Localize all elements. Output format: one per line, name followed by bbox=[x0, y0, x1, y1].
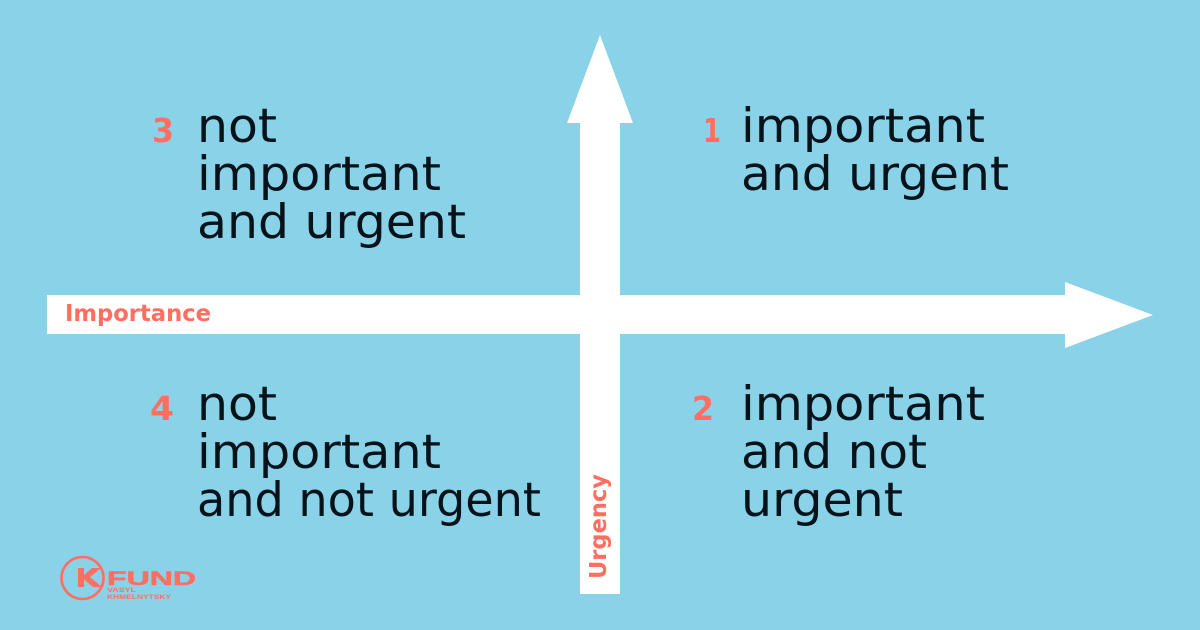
text block 4: not bbox=[197, 377, 277, 432]
text block 2: urgent bbox=[741, 473, 903, 528]
text block 1: and urgent bbox=[741, 147, 1009, 202]
axis label: Importance: Importance bbox=[65, 301, 211, 327]
text block 2: important bbox=[741, 377, 985, 432]
number 3: 3 bbox=[152, 111, 174, 150]
logo name line 1: VASYL bbox=[107, 588, 136, 594]
logo K bbox=[78, 568, 102, 587]
text block 4: and not urgent bbox=[197, 473, 541, 528]
number 2: 2 bbox=[692, 389, 714, 428]
text block 3: and urgent bbox=[197, 195, 466, 250]
quadrant 1: important and urgent bbox=[703, 99, 1009, 202]
quadrant 4: not important and not urgent bbox=[150, 377, 541, 528]
quadrant 2: important and not urgent bbox=[692, 377, 985, 528]
text block 4: important bbox=[197, 425, 441, 480]
text block 2 bbox=[741, 377, 985, 528]
text block 3 bbox=[197, 99, 466, 250]
text block 3: not bbox=[197, 99, 277, 154]
arrow: importance axis bbox=[47, 282, 1153, 348]
text block 1 bbox=[741, 99, 1009, 202]
logo ring bbox=[62, 557, 104, 599]
text block 2: and not bbox=[741, 425, 927, 480]
number 1: 1 bbox=[703, 111, 721, 150]
quadrant 3: not important and urgent bbox=[152, 99, 466, 250]
axis label: Urgency: Urgency bbox=[586, 474, 612, 579]
number 4: 4 bbox=[150, 389, 174, 428]
text block 4 bbox=[197, 377, 541, 528]
logo name line 2: KHMELNYTSKY bbox=[107, 595, 171, 601]
arrow: urgency axis bbox=[567, 35, 633, 594]
logo: KFUND bbox=[62, 557, 196, 601]
text block 3: important bbox=[197, 147, 441, 202]
logo wordmark: FUND bbox=[107, 569, 196, 590]
text block 1: important bbox=[741, 99, 985, 154]
